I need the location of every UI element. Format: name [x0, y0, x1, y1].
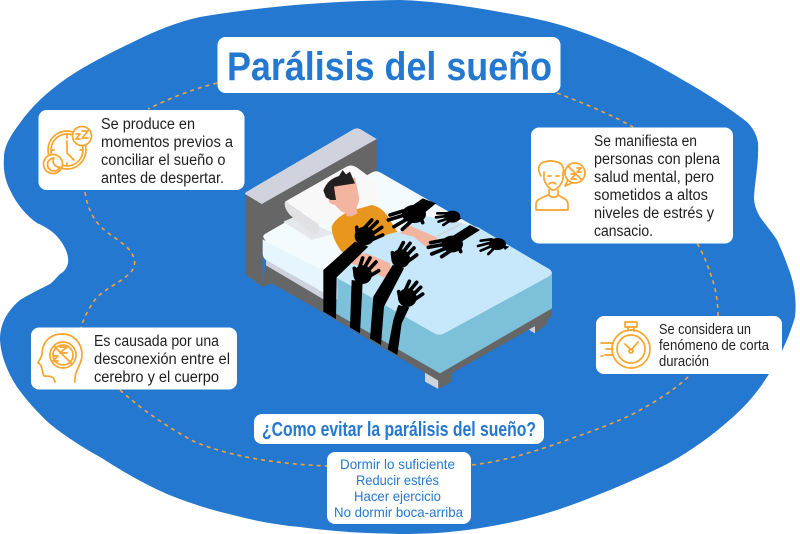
panel: mentally healthy people — [531, 128, 733, 244]
panel: prevention list: No dormir boca-arriba — [334, 504, 463, 520]
hand: upper — [388, 205, 426, 229]
text: antes de despertar. — [101, 170, 224, 187]
heading: how to avoid: ¿Como evitar la parálisis del sueño? — [262, 419, 536, 441]
mattress side — [266, 259, 552, 373]
hand: over chest — [355, 220, 383, 245]
headboard — [245, 128, 377, 287]
hand: lower right — [398, 281, 423, 307]
panel: prevention list: Dormir lo suficiente — [340, 456, 455, 472]
hand: right small — [478, 238, 506, 254]
text: Se manifiesta en — [594, 133, 697, 150]
black arms — [323, 198, 509, 355]
far arm over blanket — [400, 225, 437, 246]
icon: tired person with speech bubble — [536, 161, 585, 210]
text: personas con plena — [594, 151, 720, 168]
hair — [323, 170, 355, 200]
text: cerebro y el cuerpo — [94, 369, 219, 386]
head — [329, 177, 359, 213]
panel: prevention list: Reducir estrés — [356, 472, 439, 488]
man — [323, 170, 398, 263]
hand: center — [428, 236, 463, 257]
text: desconexión entre el — [94, 351, 230, 368]
dashed connector path — [81, 83, 718, 466]
text: Se considera un — [659, 322, 751, 338]
bed base — [263, 260, 552, 381]
sheet fold — [437, 223, 462, 237]
text: sometidos a altos — [594, 187, 708, 204]
text: niveles de estrés y — [594, 205, 714, 222]
black hands — [353, 205, 506, 307]
panel: prevention list — [327, 452, 471, 524]
pillow shadow — [283, 217, 335, 240]
hand: top small — [436, 211, 460, 225]
text: momentos previos a — [101, 134, 233, 151]
heading: how to avoid — [254, 414, 544, 444]
neck — [344, 206, 357, 216]
text: Es causada por una — [94, 333, 219, 350]
illustration: man in bed with black hands — [245, 128, 552, 389]
icon: head with crossed zz — [38, 334, 82, 382]
shirt — [332, 205, 398, 263]
text: salud mental, pero — [594, 169, 714, 186]
title: Parálisis del sueño — [227, 45, 552, 89]
white mattress side — [263, 239, 337, 299]
hand: lower left — [353, 258, 379, 284]
bed legs — [425, 313, 547, 389]
text: duración — [659, 354, 709, 370]
panel: moments before sleep — [38, 110, 244, 190]
text: cansacio. — [594, 223, 653, 240]
mattress top sheet — [263, 171, 552, 335]
pillow — [285, 165, 382, 234]
panel: short duration — [596, 316, 782, 374]
text: fenómeno de corta — [659, 338, 770, 354]
hand: middle — [391, 243, 417, 268]
blanket — [337, 216, 552, 335]
text: conciliar el sueño o — [101, 152, 226, 169]
panel: prevention list: Hacer ejercicio — [354, 488, 441, 504]
title box — [218, 37, 560, 93]
icon: stopwatch — [601, 322, 650, 368]
panel: disconnection — [31, 328, 237, 390]
near arm over blanket — [352, 253, 392, 277]
text: Se produce en — [101, 116, 195, 133]
icon: clock with moon and zz — [44, 126, 92, 174]
